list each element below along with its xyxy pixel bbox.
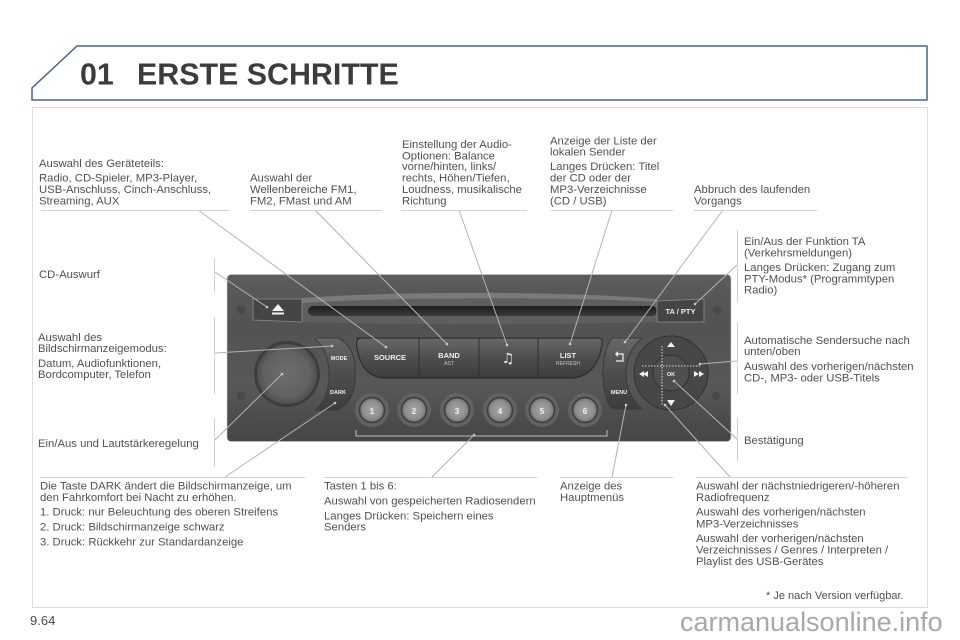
radio front panel <box>227 274 731 442</box>
leader dots <box>266 303 701 436</box>
label: DARK button: den Fahrkomfort bei Nacht zu erhöhen. <box>40 492 237 504</box>
label: station search: unten/oben <box>744 346 801 358</box>
slot surround <box>302 298 657 324</box>
eject button <box>253 299 302 322</box>
label: station search: Auswahl des vorherigen/nächsten <box>744 361 914 373</box>
preset buttons 1 to 6 <box>355 393 602 427</box>
screws <box>236 305 722 400</box>
label: abort: Abbruch des laufenden <box>694 184 810 196</box>
label: audio options: Loudness, musikalische <box>402 184 522 196</box>
source band music list buttons: SOURCE <box>374 353 406 362</box>
label: frequency selection: Verzeichnisses / Genres / Interpreten / <box>696 544 889 556</box>
preset bracket <box>356 430 607 436</box>
source band music list buttons: LIST <box>560 351 577 360</box>
watermark: carmanualsonline.info <box>680 607 943 637</box>
MODE DARK button <box>316 338 355 410</box>
label: station list: (CD / USB) <box>550 196 607 208</box>
page number: 9.64 <box>30 613 55 628</box>
label: presets: Langes Drücken: Speichern eines <box>324 510 494 522</box>
label: presets: Senders <box>324 522 366 534</box>
back MENU button: MENU <box>611 390 627 396</box>
label: wave bands: Auswahl der <box>250 172 312 184</box>
header banner <box>32 46 927 100</box>
label: display mode: Bildschirmanzeigemodus: <box>38 343 167 355</box>
label: TA function: Ein/Aus der Funktion TA <box>744 236 866 248</box>
preset buttons 1 to 6: 5 <box>540 407 545 416</box>
label: station list: lokalen Sender <box>550 146 626 158</box>
title: ERSTE SCHRITTE <box>137 58 399 92</box>
MODE DARK button: DARK <box>330 390 346 396</box>
label: station search: CD-, MP3- oder USB-Titels <box>744 372 880 384</box>
label: audio options: Einstellung der Audio- <box>402 139 512 151</box>
label: frequency selection: Radiofrequenz <box>696 492 770 504</box>
label: main menu: Anzeige des <box>560 480 623 492</box>
label: abort: Vorgangs <box>694 196 742 208</box>
label: frequency selection: MP3-Verzeichnisses <box>696 518 799 530</box>
label: display mode: Auswahl des <box>38 332 102 344</box>
source band music list buttons: ♫ <box>502 351 514 367</box>
preset buttons 1 to 6: 3 <box>455 407 460 416</box>
label: confirm: Bestätigung <box>744 435 804 447</box>
label: station list: Anzeige der Liste der <box>550 136 657 148</box>
label: station list: der CD oder der <box>550 172 631 184</box>
navigation pad: OK <box>667 372 675 378</box>
label: station search: Automatische Sendersuche nach <box>744 335 910 347</box>
label: frequency selection: Auswahl der vorherigen/nächsten <box>696 533 864 545</box>
label: CD eject: CD-Auswurf <box>39 269 101 281</box>
label: audio options: vorne/hinten, links/ <box>402 161 497 173</box>
label rules <box>40 210 907 478</box>
label: device selection: Streaming, AUX <box>39 196 120 208</box>
back MENU button <box>603 338 642 409</box>
label: display mode: Datum, Audiofunktionen, <box>38 358 161 370</box>
label: audio options: Richtung <box>402 196 447 208</box>
label: TA function: PTY-Modus* (Programmtypen <box>744 274 894 286</box>
chapter number: 01 <box>80 58 114 92</box>
label: TA function: Langes Drücken: Zugang zum <box>744 262 895 274</box>
TA PTY button: TA / PTY <box>666 307 696 316</box>
source band music list buttons: BAND <box>438 351 460 360</box>
label: device selection: Radio, CD-Spieler, MP3-Player, <box>39 172 197 184</box>
label: frequency selection: Auswahl der nächstniedrigeren/-höheren <box>696 480 899 492</box>
label: station list: MP3-Verzeichnisse <box>550 184 647 196</box>
label: wave bands: Wellenbereiche FM1, <box>250 184 357 196</box>
source band music list buttons <box>356 338 602 378</box>
navigation pad <box>634 336 708 410</box>
volume knob <box>254 341 320 407</box>
label: TA function: Radio) <box>744 284 778 296</box>
label: DARK button: Die Taste DARK ändert die Bildschirmanzeige, um <box>40 480 292 492</box>
label: TA function: (Verkehrsmeldungen) <box>744 248 852 260</box>
label: power volume: Ein/Aus und Lautstärkeregelung <box>38 438 199 450</box>
label: station list: Langes Drücken: Titel <box>550 161 659 173</box>
preset buttons 1 to 6: 2 <box>412 407 417 416</box>
source band music list buttons: AST <box>444 361 454 367</box>
label: device selection: Auswahl des Geräteteils: <box>39 158 164 170</box>
source band music list buttons: REFRESH <box>556 361 580 367</box>
label: DARK button: 2. Druck: Bildschirmanzeige schwarz <box>40 522 225 534</box>
CD slot <box>308 306 657 316</box>
footnote: * Je nach Version verfügbar. <box>766 590 904 602</box>
label: presets: Tasten 1 bis 6: <box>324 480 397 492</box>
label: main menu: Hauptmenüs <box>560 492 624 504</box>
label: device selection: USB-Anschluss, Cinch-Anschluss, <box>39 184 211 196</box>
preset buttons 1 to 6: 6 <box>583 407 588 416</box>
MODE DARK button: MODE <box>331 356 348 362</box>
label: presets: Auswahl von gespeicherten Radiosendern <box>324 496 536 508</box>
TA PTY button <box>657 299 704 322</box>
label: display mode: Bordcomputer, Telefon <box>38 369 151 381</box>
preset buttons 1 to 6: 1 <box>370 407 375 416</box>
label: wave bands: FM2, FMast und AM <box>250 196 352 208</box>
preset buttons 1 to 6: 4 <box>498 407 503 416</box>
label: DARK button: 1. Druck: nur Beleuchtung des oberen Streifens <box>40 506 278 518</box>
label: frequency selection: Playlist des USB-Gerätes <box>696 556 824 568</box>
label: audio options: rechts, Höhen/Tiefen, <box>402 172 510 184</box>
label: audio options: Optionen: Balance <box>402 150 495 162</box>
label: DARK button: 3. Druck: Rückkehr zur Standardanzeige <box>40 536 243 548</box>
leader lines <box>198 210 738 477</box>
slot highlight <box>302 293 657 303</box>
content panel <box>32 108 928 608</box>
label: frequency selection: Auswahl des vorherigen/nächsten <box>696 506 866 518</box>
